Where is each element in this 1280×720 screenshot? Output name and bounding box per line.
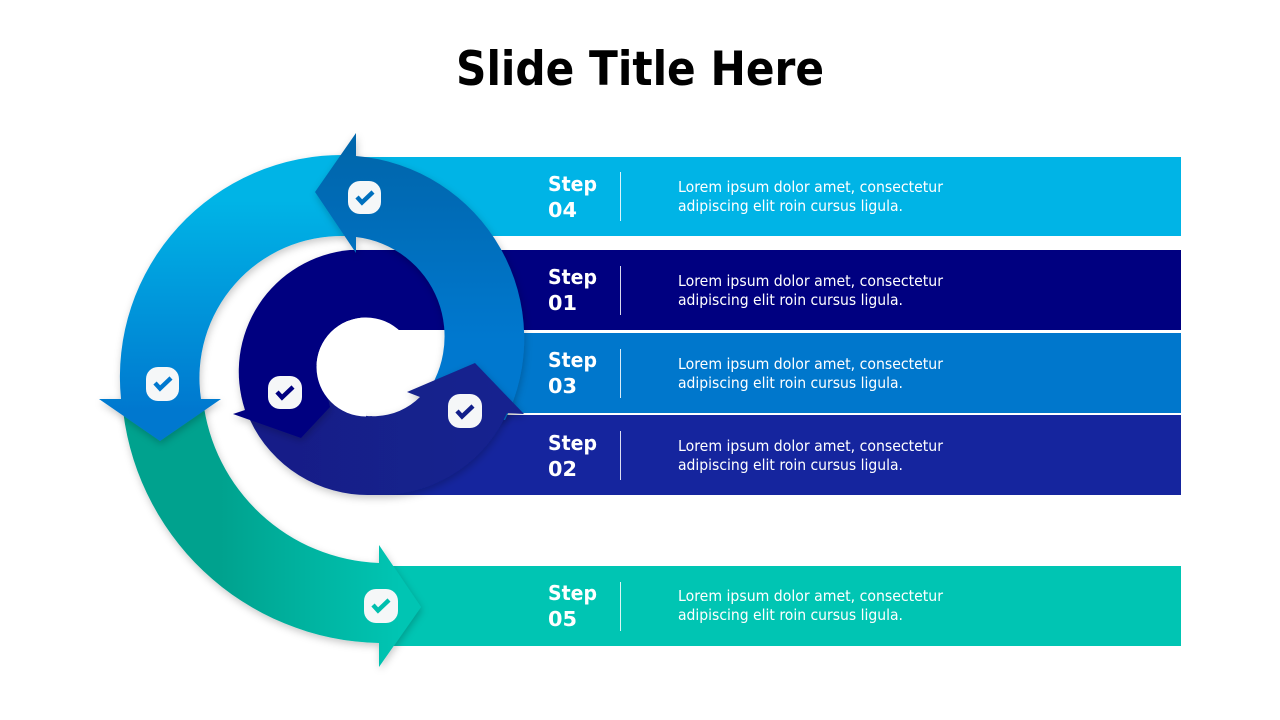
panel: step 01: adipiscing elit roin cursus ligula. <box>678 291 903 309</box>
arrow: step 02 indigo <box>250 363 524 495</box>
title: Slide Title Here <box>456 42 824 97</box>
panel: step 05: adipiscing elit roin cursus ligula. <box>678 606 903 624</box>
panel: step 03: Step <box>548 348 597 372</box>
panel: step 05 <box>390 566 1181 646</box>
panel: step 03: 03 <box>548 374 577 398</box>
panel: step 01: Lorem ipsum dolor amet, consectetur <box>678 272 944 290</box>
arrow: step 04 light blue <box>99 155 345 441</box>
panel: step 04: Lorem ipsum dolor amet, consectetur <box>678 178 944 196</box>
panel: step 01: Step <box>548 265 597 289</box>
panel: step 02: Step <box>548 431 597 455</box>
panel: step 02: Lorem ipsum dolor amet, consectetur <box>678 437 944 455</box>
panel: step 01 <box>400 250 1181 330</box>
panel: step 01: 01 <box>548 291 577 315</box>
panel: step 04 <box>345 157 1181 236</box>
panel: step 03 <box>460 333 1181 413</box>
panel: step 03: adipiscing elit roin cursus ligula. <box>678 374 903 392</box>
panel: step 04: 04 <box>548 198 577 222</box>
icon: check step 04 <box>348 181 381 214</box>
arrow: step 03 blue <box>315 133 524 420</box>
panel: step 05: 05 <box>548 607 577 631</box>
panel: step 02 <box>370 415 1181 495</box>
panel: step 02: adipiscing elit roin cursus ligula. <box>678 456 903 474</box>
panel: step 04: Step <box>548 172 597 196</box>
icon: check step 02 <box>448 394 482 428</box>
arrow: step 01 navy body <box>239 250 450 410</box>
panel: step 03: Lorem ipsum dolor amet, consectetur <box>678 355 944 373</box>
panel: step 02: 02 <box>548 457 577 481</box>
icon: check step 01 <box>268 376 302 409</box>
panel: step 04: adipiscing elit roin cursus ligula. <box>678 197 903 215</box>
arrow: step 01 navy head <box>233 318 366 438</box>
centre hole <box>316 318 450 425</box>
icon: check step 05 <box>364 589 398 623</box>
panel: step 05: Lorem ipsum dolor amet, consectetur <box>678 587 944 605</box>
icon: check step 03 <box>146 367 179 401</box>
panel: step 05: Step <box>548 581 597 605</box>
arrow: step 05 green <box>122 400 421 667</box>
